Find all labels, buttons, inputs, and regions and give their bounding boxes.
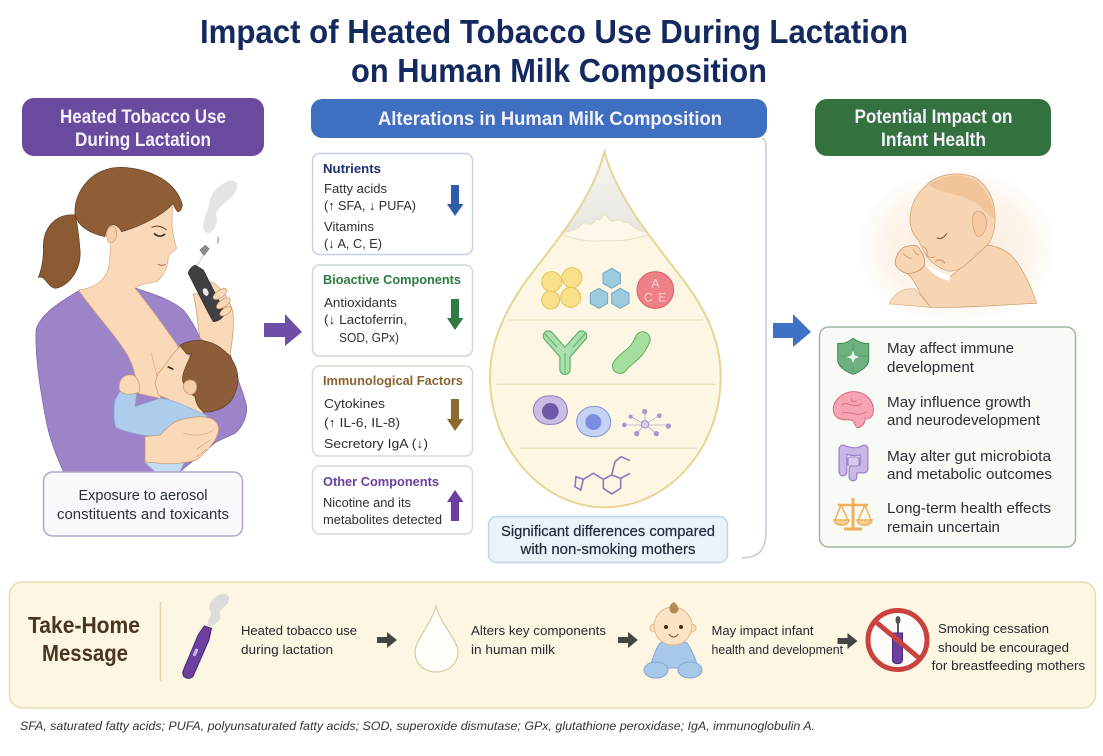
arrow: immunological factors changed — [447, 399, 464, 431]
heading: take-home message: Message — [42, 640, 128, 666]
callout: significant differences — [488, 516, 728, 562]
text: may impact infant: health and development — [712, 643, 844, 657]
card: nutrients — [312, 154, 472, 254]
icon: hexagon molecules — [590, 268, 629, 308]
text: growth and neurodevelopment: May influence growth — [887, 395, 1031, 411]
icon: protein chain — [620, 339, 643, 366]
card: bioactive components: SOD, GPx) — [339, 330, 399, 345]
text: may impact infant: May impact infant — [712, 624, 814, 638]
text: long-term effects — [887, 501, 1051, 536]
text: gut microbiota: May alter gut microbiota — [887, 449, 1052, 465]
card: nutrients: (↓ A, C, E) — [324, 236, 382, 251]
heading: potential impact on infant health: Potential Impact on — [854, 107, 1012, 128]
callout: exposure to aerosol constituents and toxicants: constituents and toxicants — [57, 507, 229, 523]
text: long-term effects: remain uncertain — [887, 520, 1000, 536]
text: gut microbiota — [887, 449, 1052, 483]
heading: heated tobacco use during lactation — [22, 98, 264, 156]
icon: vitamins A C E: E — [658, 290, 666, 304]
icon: purple device with smoke — [183, 594, 229, 678]
text: gut microbiota: and metabolic outcomes — [887, 467, 1052, 483]
icon: no smoking sign — [868, 610, 927, 670]
icon: milk drop — [415, 606, 458, 672]
arrow: bioactive components decreased — [447, 299, 464, 330]
callout: significant differences: with non-smoking mothers — [519, 542, 696, 558]
panel frame line — [742, 138, 766, 558]
card: nutrients: Vitamins — [324, 219, 374, 234]
text: alters key components: Alters key components — [471, 624, 606, 638]
card: immunological factors: Cytokines — [324, 396, 386, 411]
arrow: step two to three — [618, 632, 638, 648]
icon: vitamins A C E: C — [644, 290, 653, 304]
text: smoking cessation: Smoking cessation — [938, 622, 1049, 636]
arrow: exposure to milk alterations — [264, 314, 302, 346]
arrow: step one to two — [377, 632, 397, 648]
card: immunological factors: Immunological Factors — [323, 373, 463, 388]
callout: significant differences: Significant differences compared — [501, 524, 715, 540]
heading: heated tobacco use during lactation: During Lactation — [75, 130, 211, 151]
panel: potential impact on infant health — [815, 99, 1076, 547]
card: immunological factors — [312, 366, 472, 456]
card: nutrients: Fatty acids — [324, 181, 387, 196]
card: bioactive components: (↓ Lactoferrin, — [324, 312, 407, 327]
card: other components: Nicotine and its — [323, 495, 411, 510]
icon: scales — [834, 498, 872, 529]
card: other components: metabolites detected — [323, 512, 442, 527]
text: long-term effects: Long-term health effects — [887, 501, 1051, 517]
icon: immune cell purple — [533, 396, 567, 424]
panel: alterations in human milk composition — [311, 99, 767, 562]
card: other components — [312, 466, 472, 534]
heading: potential impact on infant health — [815, 99, 1051, 156]
panel: take-home message — [10, 582, 1096, 708]
card: immunological factors: Secretory IgA (↓) — [324, 436, 428, 451]
title: on Human Milk Composition — [351, 52, 767, 89]
heading: alterations in human milk composition: Alterations in Human Milk Composition — [378, 109, 722, 130]
text: may impact infant — [712, 624, 844, 657]
text: heated tobacco use: during lactation — [241, 643, 333, 657]
text: immune development — [887, 341, 1014, 376]
heading: alterations in human milk composition — [311, 99, 767, 138]
heading: take-home message — [28, 612, 140, 666]
icon: brain — [833, 392, 873, 428]
heading: potential impact on infant health: Infant Health — [881, 130, 986, 151]
card: bioactive components — [312, 265, 472, 356]
card: bioactive components: Bioactive Components — [323, 272, 461, 287]
icon: gut — [843, 449, 864, 477]
text: smoking cessation: for breastfeeding mothers — [932, 659, 1085, 673]
icon: cartoon baby — [644, 602, 702, 678]
footnote: abbreviations: SFA, saturated fatty acids; PUFA, polyunsaturated fatty acids; SOD, superoxide dismutase; GPx, glutathione peroxidase; IgA, immunoglobulin A. — [20, 719, 815, 733]
text: growth and neurodevelopment — [887, 395, 1040, 429]
text: alters key components: in human milk — [471, 643, 556, 657]
text: alters key components — [471, 624, 606, 657]
text: heated tobacco use — [241, 624, 357, 657]
icon: fatty acid clusters — [542, 268, 582, 309]
card: nutrients: Nutrients — [323, 161, 381, 176]
text: smoking cessation — [932, 622, 1085, 673]
text: heated tobacco use: Heated tobacco use — [241, 624, 357, 638]
icon: vitamins A C E — [637, 272, 674, 308]
callout: exposure to aerosol constituents and toxicants — [44, 472, 242, 536]
text: smoking cessation: should be encouraged — [938, 641, 1069, 655]
callout: exposure to aerosol constituents and toxicants: Exposure to aerosol — [78, 488, 208, 504]
icon: cytokine network — [622, 409, 671, 436]
panel: health impact list — [820, 327, 1076, 547]
card: other components: Other Components — [323, 474, 439, 489]
title — [200, 13, 908, 89]
heading: heated tobacco use during lactation: Heated Tobacco Use — [60, 107, 226, 128]
icon: immune cell blue — [577, 406, 611, 437]
heading: take-home message: Take-Home — [28, 612, 140, 638]
icon: shield — [838, 338, 869, 374]
arrow: step three to four — [838, 633, 858, 649]
arrow: nicotine increased — [447, 490, 464, 521]
text: immune development: development — [887, 360, 974, 376]
card: immunological factors: (↑ IL-6, IL-8) — [324, 415, 400, 430]
icon: nicotine molecule — [575, 457, 630, 494]
card: bioactive components: Antioxidants — [324, 295, 398, 310]
icon: antibody — [545, 334, 585, 373]
title: Impact of Heated Tobacco Use During Lactation — [200, 13, 908, 50]
icon: vitamins A C E: A — [651, 276, 659, 290]
illustration: mother breastfeeding while using a heated tobacco device — [36, 167, 247, 472]
arrow: nutrients decreased — [447, 185, 464, 216]
card: nutrients: (↑ SFA, ↓ PUFA) — [324, 198, 416, 213]
text: growth and neurodevelopment: and neurodevelopment — [887, 413, 1040, 429]
illustration: sleeping infant — [853, 167, 1060, 327]
arrow: milk alterations to infant health — [773, 314, 811, 347]
illustration: milk drop with components — [490, 150, 721, 507]
text: immune development: May affect immune — [887, 341, 1014, 357]
panel: heated tobacco use — [22, 98, 264, 536]
